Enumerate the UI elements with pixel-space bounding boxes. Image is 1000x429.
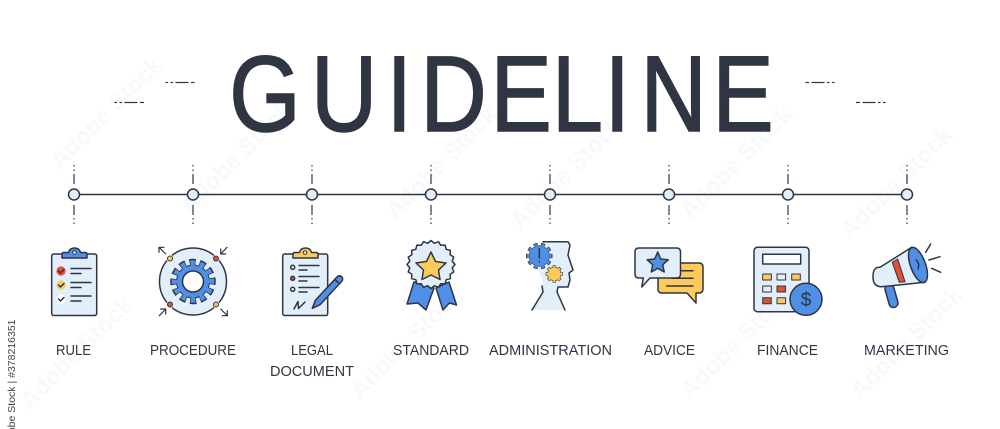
label: marketing: MARKETING — [864, 342, 949, 359]
icon: legal document — [283, 248, 343, 316]
icon: finance calculator: $ — [801, 290, 812, 311]
watermark: Adobe Stock — [345, 281, 468, 404]
label: legal document: DOCUMENT — [270, 363, 354, 380]
label: legal document: LEGAL — [291, 342, 333, 359]
icon: standard badge — [407, 240, 456, 310]
watermark: Adobe Stock — [45, 51, 168, 174]
icon: administration head — [528, 242, 573, 310]
watermark: Adobe Stock — [675, 101, 798, 224]
icon: finance calculator — [754, 247, 822, 315]
watermark: Adobe Stock — [175, 96, 298, 219]
watermark: Adobe Stock — [845, 281, 968, 404]
label: legal document — [270, 342, 354, 380]
label: administration: ADMINISTRATION — [489, 342, 612, 359]
icon: rule clipboard — [52, 248, 97, 316]
icon: procedure gear — [159, 247, 227, 316]
label: procedure: PROCEDURE — [150, 342, 236, 359]
icon: marketing megaphone — [873, 244, 941, 303]
title: GUIDELINE — [229, 34, 774, 155]
watermark: Adobe Stock — [835, 121, 958, 244]
label: standard: STANDARD — [393, 342, 469, 359]
icon: advice speech bubbles — [635, 248, 703, 303]
label: advice: ADVICE — [644, 342, 695, 359]
watermark: Adobe Stock — [505, 111, 628, 234]
watermark: Adobe Stock — [675, 281, 798, 404]
watermark: Adobe Stock — [380, 101, 503, 224]
label: rule: RULE — [56, 342, 91, 359]
decorative dashes — [115, 82, 885, 102]
watermark: Adobe Stock — [15, 291, 138, 414]
label: finance: FINANCE — [757, 342, 818, 359]
timeline — [68, 165, 912, 224]
